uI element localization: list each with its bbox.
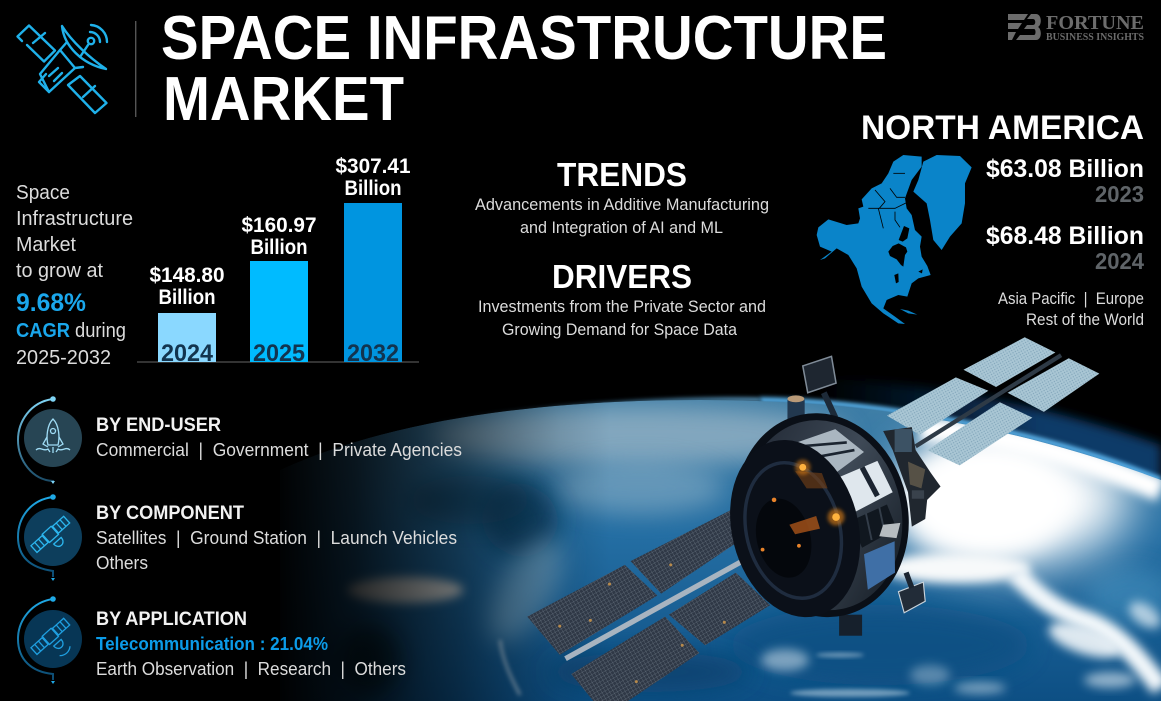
antenna modules [787,356,941,636]
other regions: Rest of the World [1026,311,1144,329]
logo: Fortune Business Insights [1008,12,1144,43]
heading: by application [96,608,406,679]
north america values: 2023 [1095,181,1144,207]
drivers: DRIVERS [552,258,692,295]
text: CAGR statement: to grow at [16,260,103,282]
text: CAGR statement: 2025-2032 [16,347,111,369]
other regions [998,290,1144,329]
text: CAGR statement: Space [16,182,70,204]
deep ocean [742,601,1018,664]
icon: satellite dish [18,25,107,113]
trends: Advancements in Additive Manufacturing [475,196,769,214]
upper solar array [887,337,1099,465]
bar: 2032: Billion [344,176,402,200]
sparkling clouds [761,649,809,671]
trends: and Integration of AI and ML [520,219,723,237]
heading: by end-user: Commercial | Government | Private Agencies [96,440,462,460]
text: CAGR statement: CAGR during [16,320,126,342]
bright cloud mass [890,435,1130,565]
drivers [478,258,766,339]
heading: by component: Others [96,553,148,573]
lower solar array [527,508,770,701]
bar: 2032: $307.41 [336,154,411,178]
logo: Fortune Business Insights: BUSINESS INSIGHTS [1046,32,1144,43]
bar: 2024: $148.80 [150,263,225,287]
title [161,3,887,134]
upper-left hazy clouds [430,406,850,466]
bar: 2025: 2025 [253,340,305,367]
north america values: 2024 [1095,248,1144,274]
north america values [986,155,1144,274]
heading: by component [96,502,457,573]
bar: 2025: Billion [250,235,308,259]
map: North America [817,155,972,324]
heading: by application: Earth Observation | Research | Others [96,659,406,679]
logo: Fortune Business Insights: FORTUNE [1046,12,1144,34]
title: MARKET [163,64,404,134]
bar: 2032: 2032 [347,340,399,367]
bar: 2024: 2024 [161,340,214,367]
text: CAGR statement: 9.68% [16,289,86,317]
main body [712,397,927,633]
orange lights [761,460,844,552]
trends: TRENDS [557,156,687,193]
bar: 2025 [242,213,317,367]
text: CAGR statement: Market [16,234,76,256]
text: CAGR statement [16,182,133,369]
heading: by application: Telecommunication : 21.04% [96,634,328,654]
heading: by end-user [96,414,462,460]
bar: 2025: $160.97 [242,213,317,237]
north america values: $68.48 Billion [986,222,1144,250]
earth photo background [294,380,1161,701]
north america values: $63.08 Billion [986,155,1144,183]
icon: communication satellite badge [18,596,82,684]
drivers: Growing Demand for Space Data [502,321,738,339]
heading: by end-user: BY END-USER [96,414,221,436]
satellite photo [527,337,1099,701]
bar chart [137,154,419,367]
bar: 2032 [336,154,411,367]
title: SPACE INFRASTRUCTURE [161,3,887,73]
drivers: Investments from the Private Sector and [478,298,766,316]
region heading: NORTH AMERICA [861,109,1144,147]
trends [475,156,769,237]
divider [135,21,136,117]
heading: by component: BY COMPONENT [96,502,244,524]
other regions: Asia Pacific | Europe [998,290,1144,308]
heading: by application: BY APPLICATION [96,608,247,630]
text: CAGR statement: Infrastructure [16,208,133,230]
icon: satellite badge [18,494,82,581]
heading: by component: Satellites | Ground Station | Launch Vehicles [96,528,457,548]
bar: 2024: Billion [158,285,216,309]
bar: 2024 [150,263,225,367]
icon: rocket badge [18,396,82,484]
